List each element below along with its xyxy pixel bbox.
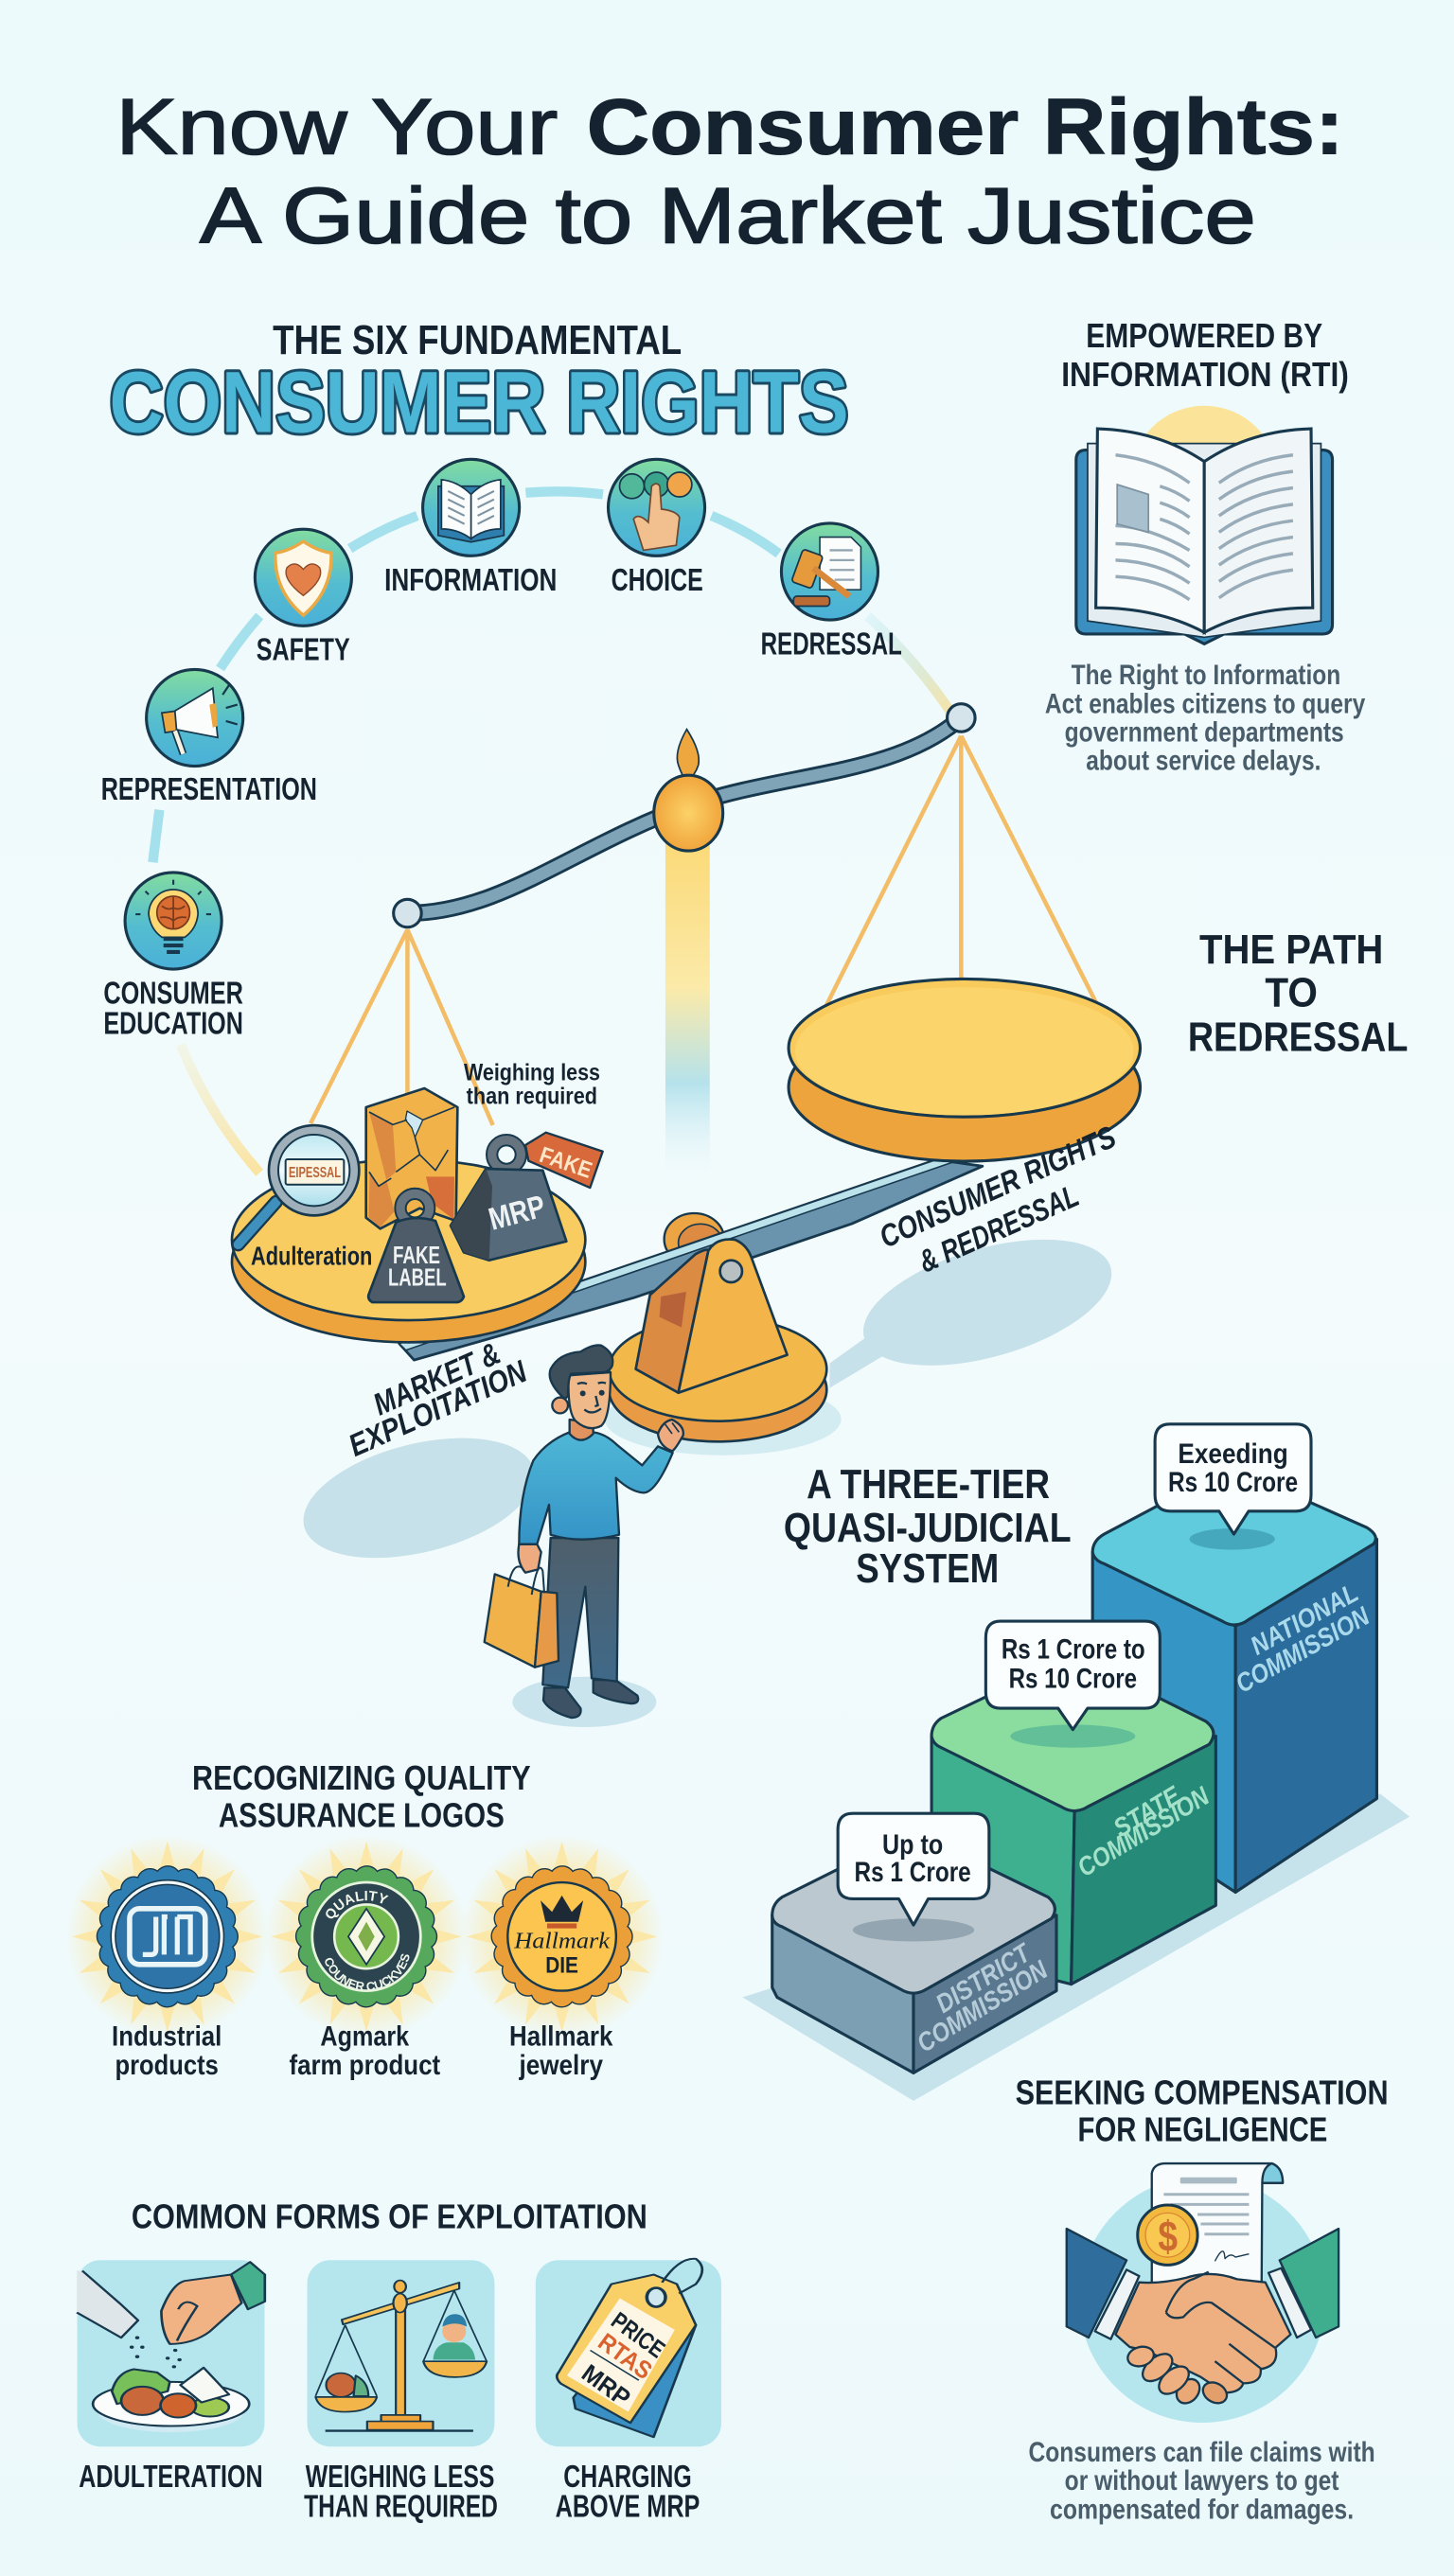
- card: weighing less: [308, 2260, 494, 2446]
- callout: up to 1 crore: [838, 1813, 989, 1925]
- badge: Agmark: COUNER CUCKVES: [325, 1953, 409, 1991]
- labels: logo captions: [112, 2021, 613, 2081]
- pedestal: [609, 1240, 826, 1441]
- callout: 1 to 10 crore: Rs 10 Crore: [1009, 1663, 1137, 1694]
- heading: six fundamental consumer rights: THE SIX FUNDAMENTAL: [273, 318, 682, 363]
- text: compensation description: or without lawyers to get: [1065, 2465, 1339, 2497]
- item: fake label weight: [368, 1193, 464, 1302]
- tier: national commission: [1092, 1471, 1376, 1892]
- label: consumer education: [103, 975, 243, 1040]
- text: RTI description: about service delays.: [1086, 745, 1321, 776]
- callout: 1 to 10 crore: Rs 1 Crore to: [1002, 1633, 1145, 1665]
- text: RTI description: government departments: [1065, 717, 1344, 749]
- item: cracked box: [366, 1088, 457, 1228]
- label: redressal: REDRESSAL: [761, 626, 902, 662]
- heading: six fundamental consumer rights: [110, 318, 849, 450]
- heading: seeking compensation: FOR NEGLIGENCE: [1078, 2110, 1327, 2149]
- item: MRP weight: MRP: [485, 1189, 549, 1238]
- card: adulteration: [77, 2260, 265, 2446]
- heading: seeking compensation: SEEKING COMPENSATION: [1016, 2073, 1389, 2111]
- icon: open book: [1076, 406, 1333, 644]
- text: RTI description: The Right to Information: [1072, 660, 1340, 691]
- badge: Hallmark: Hallmark: [513, 1928, 611, 1953]
- heading: quality logos: RECOGNIZING QUALITY: [192, 1758, 531, 1797]
- labels: exploitation captions: ABOVE MRP: [556, 2489, 700, 2524]
- heading: path to redressal: THE PATH: [1199, 927, 1383, 973]
- pan: [232, 1159, 585, 1342]
- icon: representation: [147, 669, 243, 767]
- labels: logo captions: Hallmark: [509, 2021, 613, 2053]
- heading: path to redressal: REDRESSAL: [1188, 1015, 1408, 1061]
- heading: quality logos: ASSURANCE LOGOS: [219, 1796, 505, 1835]
- heading: quality logos: [192, 1758, 531, 1835]
- heading: three-tier system: [784, 1462, 1072, 1592]
- card: price tag: PRICE: [606, 2307, 669, 2364]
- label: consumer rights and redressal: [874, 1119, 1121, 1279]
- labels: logo captions: farm product: [289, 2050, 440, 2081]
- heading: common forms of exploitation: COMMON FORMS OF EXPLOITATION: [132, 2197, 647, 2236]
- chains: [310, 736, 1104, 1125]
- label: representation: REPRESENTATION: [101, 771, 317, 806]
- labels: logo captions: Agmark: [320, 2021, 410, 2053]
- tier: state commission: COMMISSION: [1073, 1781, 1215, 1882]
- labels: exploitation captions: CHARGING: [563, 2459, 692, 2494]
- rights arc: [152, 491, 954, 1173]
- label: consumer education: CONSUMER: [103, 975, 243, 1010]
- labels: exploitation captions: THAN REQUIRED: [304, 2489, 498, 2524]
- badge: Hallmark: DIE: [545, 1953, 578, 1979]
- title: Know Your: [115, 82, 558, 170]
- icon: consumer education: [125, 873, 222, 969]
- left pan with exploitation items: [232, 1060, 603, 1342]
- labels: logo captions: Industrial: [112, 2021, 222, 2053]
- right pan: [789, 979, 1141, 1161]
- top balance beam: [394, 704, 975, 927]
- labels: exploitation captions: [79, 2459, 700, 2524]
- heading: three-tier system: QUASI-JUDICIAL: [784, 1506, 1072, 1551]
- item: magnifier: EIPESSAL: [289, 1165, 341, 1181]
- callout: 1 to 10 crore: [985, 1621, 1160, 1730]
- label: adulteration: Adulteration: [251, 1242, 372, 1271]
- label: weighing less: [464, 1060, 600, 1110]
- badge: Agmark: [270, 1840, 464, 2033]
- text: compensation description: Consumers can file claims with: [1028, 2437, 1375, 2468]
- label: consumer rights and redressal: CONSUMER RIGHTS: [874, 1119, 1121, 1254]
- label: market and exploitation: MARKET &: [368, 1335, 505, 1422]
- label: choice: CHOICE: [612, 562, 703, 597]
- item: fake label weight: LABEL: [388, 1262, 447, 1291]
- badge: Hallmark: [460, 1835, 664, 2038]
- item: fake tag: [525, 1133, 603, 1188]
- heading: path to redressal: TO: [1265, 971, 1318, 1016]
- label: weighing less: than required: [467, 1084, 597, 1110]
- callout: exceeding 10 crore: Exeeding: [1178, 1438, 1288, 1470]
- label: information: INFORMATION: [384, 562, 557, 597]
- tier: national commission: NATIONAL: [1246, 1578, 1363, 1661]
- heading: path to redressal: [1188, 927, 1408, 1061]
- badge: Agmark: QUALITY: [326, 1891, 388, 1919]
- icon: information: [423, 459, 520, 556]
- label: weighing less: Weighing less: [464, 1060, 600, 1086]
- text: RTI description: Act enables citizens to query: [1045, 688, 1366, 719]
- icon: safety: [255, 529, 351, 626]
- labels: exploitation captions: ADULTERATION: [79, 2459, 263, 2494]
- tier: state commission: STATE: [1108, 1780, 1186, 1843]
- text: compensation description: [1028, 2437, 1375, 2525]
- tier: district commission: DISTRICT: [931, 1937, 1037, 2019]
- callout: up to 1 crore: Up to: [882, 1829, 943, 1861]
- scale column: [665, 829, 710, 1183]
- item: magnifier: [239, 1125, 359, 1244]
- icon: redressal: [781, 523, 878, 620]
- label: safety: SAFETY: [257, 632, 350, 667]
- heading: RTI: EMPOWERED BY: [1086, 316, 1322, 355]
- heading: RTI: [1061, 316, 1349, 394]
- lower lever beam: [399, 1159, 983, 1360]
- icon: handshake with document: [1067, 2163, 1339, 2423]
- label: market and exploitation: EXPLOITATION: [344, 1353, 533, 1463]
- shadows under scale: [291, 1215, 1126, 1579]
- icon: choice: [609, 459, 705, 556]
- scale pivot finial: [654, 730, 723, 851]
- title: Consumer Rights:: [587, 82, 1344, 170]
- tier: district commission: COMMISSION: [912, 1954, 1054, 2058]
- item: fake label weight: FAKE: [393, 1241, 440, 1269]
- text: RTI description: [1045, 660, 1366, 776]
- label: consumer education: EDUCATION: [103, 1005, 243, 1040]
- card: price tag: RTAS: [593, 2327, 658, 2385]
- heading: RTI: INFORMATION (RTI): [1061, 355, 1349, 394]
- title: A Guide to Market Justice: [200, 172, 1256, 260]
- item: fake tag: FAKE: [536, 1142, 595, 1184]
- icon: handshake with document: $: [1158, 2212, 1178, 2260]
- callout: exceeding 10 crore: Rs 10 Crore: [1168, 1467, 1298, 1498]
- title: [115, 82, 1344, 260]
- labels: logo captions: products: [115, 2050, 219, 2081]
- tier: district commission: [772, 1836, 1056, 2073]
- label: consumer rights and redressal: & REDRESSAL: [913, 1177, 1084, 1279]
- text: compensation description: compensated for damages.: [1050, 2494, 1354, 2525]
- card: price tag: MRP: [576, 2358, 636, 2412]
- card: price tag: [536, 2259, 721, 2446]
- tier platform: [742, 1793, 1410, 2101]
- tier: state commission: [931, 1659, 1215, 1985]
- labels: exploitation captions: WEIGHING LESS: [306, 2459, 494, 2494]
- consumer figure: [485, 1345, 683, 1727]
- pedestal back: [665, 1213, 724, 1265]
- heading: three-tier system: SYSTEM: [856, 1546, 999, 1592]
- heading: three-tier system: A THREE-TIER: [807, 1462, 1050, 1508]
- item: MRP weight: [451, 1140, 566, 1261]
- callout: exceeding 10 crore: [1155, 1424, 1311, 1534]
- labels: logo captions: jewelry: [519, 2050, 603, 2081]
- heading: six fundamental consumer rights: CONSUMER RIGHTS: [110, 354, 849, 450]
- tier: national commission: COMMISSION: [1231, 1600, 1374, 1699]
- badge: ISI mark: [65, 1835, 269, 2038]
- heading: seeking compensation: [1016, 2073, 1389, 2149]
- callout: up to 1 crore: Rs 1 Crore: [855, 1857, 971, 1888]
